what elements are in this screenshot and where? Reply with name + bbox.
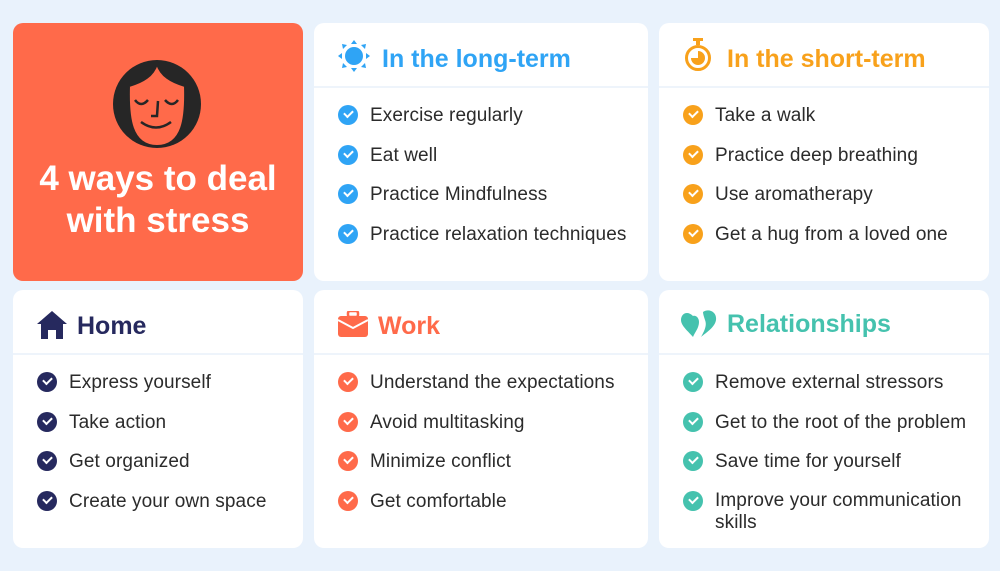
list: Create your own space — [69, 490, 266, 512]
list: Avoid multitasking — [370, 412, 525, 432]
heading: In the short-term — [727, 45, 926, 73]
list: Take action — [69, 412, 166, 432]
list: Exercise regularly — [370, 105, 523, 126]
panel: title card — [13, 23, 303, 281]
heading: In the long-term — [382, 45, 571, 73]
list — [338, 105, 626, 244]
list: Improve your communication skills — [715, 490, 962, 532]
panel: short-term — [659, 23, 989, 281]
list — [683, 372, 966, 532]
list: Practice deep breathing — [715, 144, 918, 166]
list: Express yourself — [69, 372, 211, 393]
heading: Work — [378, 312, 440, 340]
panel: long-term — [314, 23, 648, 281]
list: Understand the expectations — [370, 372, 615, 393]
heading: Home — [77, 312, 146, 340]
icon: hearts — [681, 310, 716, 337]
list — [683, 105, 948, 244]
list: Save time for yourself — [715, 451, 901, 472]
icon: calm face — [113, 60, 201, 148]
panel: relationships — [659, 290, 989, 548]
list: Use aromatherapy — [715, 184, 873, 205]
heading: Relationships — [727, 310, 891, 338]
list: Take a walk — [715, 105, 815, 126]
list: Eat well — [370, 144, 437, 166]
panel: work — [314, 290, 648, 548]
list — [338, 372, 615, 512]
list: Get organized — [69, 451, 190, 472]
icon: house — [37, 311, 67, 339]
list: Get to the root of the problem — [715, 412, 966, 432]
list: Practice relaxation techniques — [370, 224, 626, 244]
list: Minimize conflict — [370, 451, 511, 472]
icon: briefcase — [338, 311, 368, 337]
list: Get a hug from a loved one — [715, 224, 948, 244]
panel: home — [13, 290, 303, 548]
list: Practice Mindfulness — [370, 184, 547, 205]
list: Get comfortable — [370, 490, 507, 512]
title: with stress — [67, 201, 249, 240]
list — [37, 372, 266, 512]
icon: stopwatch — [685, 38, 711, 71]
title — [39, 159, 277, 240]
title: 4 ways to deal — [39, 159, 277, 198]
list: Remove external stressors — [715, 372, 943, 393]
icon: sun — [338, 40, 370, 72]
